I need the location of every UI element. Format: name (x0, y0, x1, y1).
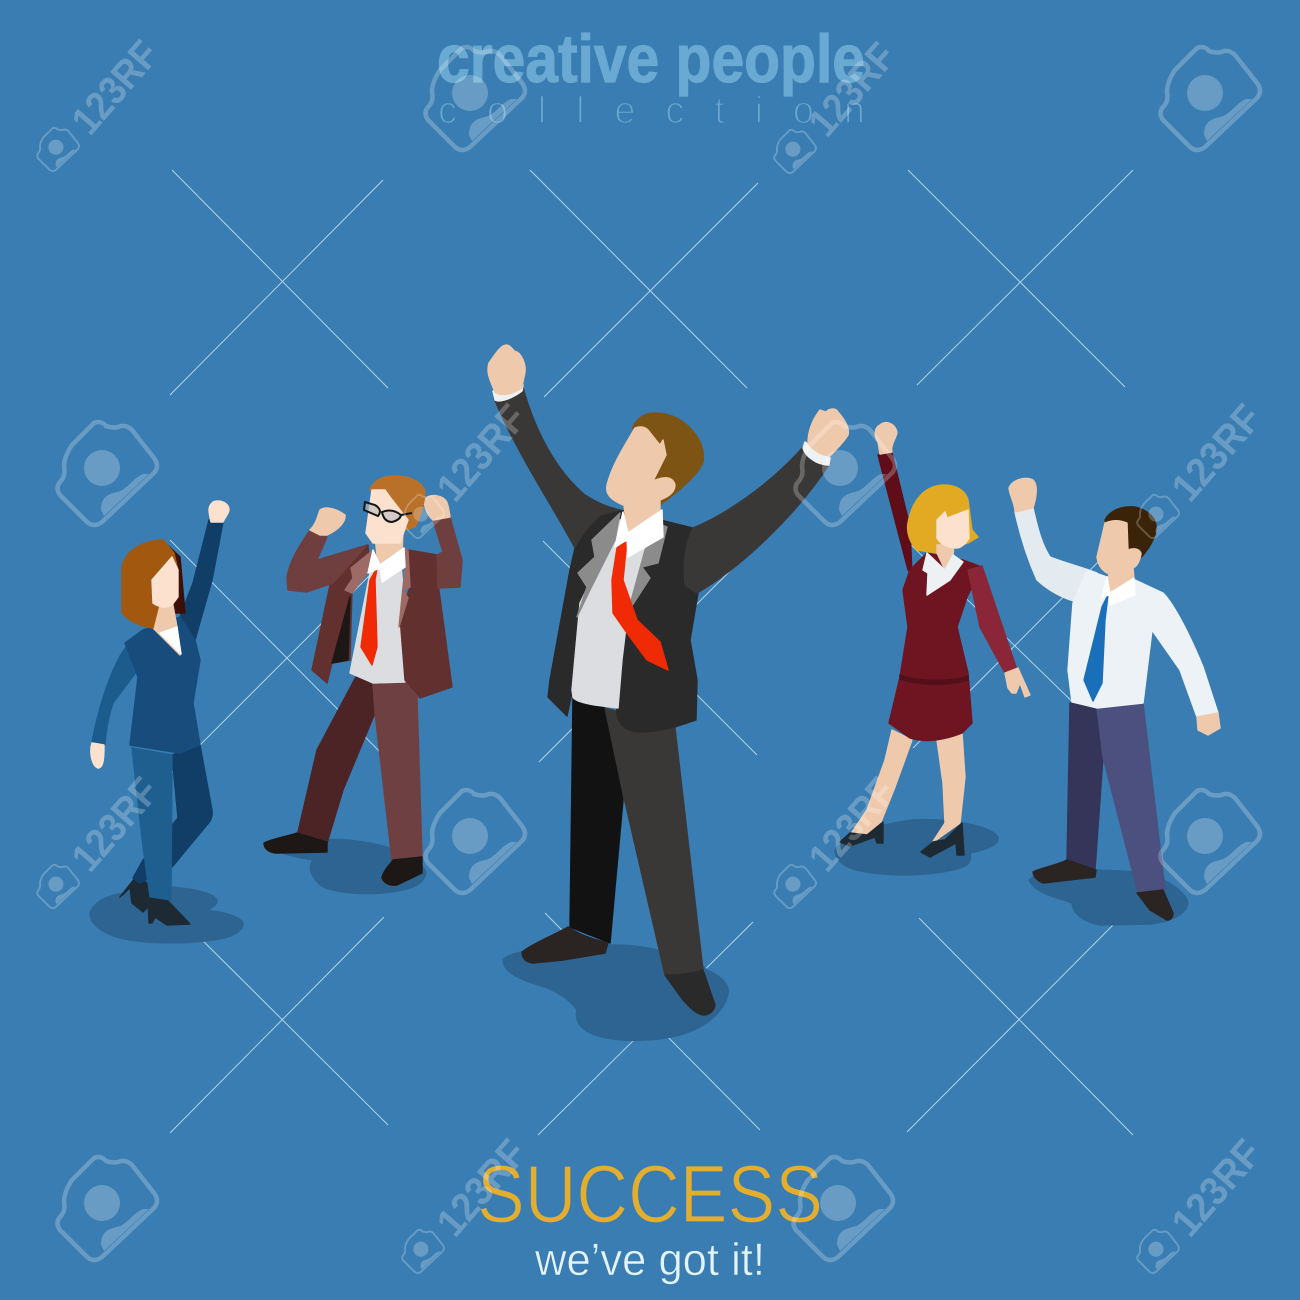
watermark stamps: 123RF (801, 770, 905, 880)
right hand (424, 495, 450, 520)
left fist (488, 345, 525, 395)
shirt (350, 555, 405, 683)
right raised arm (684, 445, 830, 593)
hair back (163, 541, 185, 613)
dress (889, 553, 982, 740)
front leg (373, 682, 422, 860)
lining (332, 597, 350, 663)
front shoe (148, 898, 190, 925)
left shoe (522, 927, 608, 963)
collar (923, 553, 963, 595)
left fist (310, 508, 345, 535)
lapel right (628, 525, 667, 612)
header: creative people collection (437, 21, 865, 132)
left arm (287, 530, 367, 592)
raised arm and fist (180, 520, 223, 640)
right hand (1197, 713, 1220, 735)
left cuff (493, 385, 523, 401)
right arm (1135, 580, 1218, 717)
back leg (1067, 703, 1103, 870)
face (1097, 521, 1141, 573)
neck and blouse (153, 600, 180, 655)
right cuff (803, 442, 830, 465)
lapel left (577, 513, 620, 617)
jacket left side (312, 545, 370, 683)
back leg (133, 745, 212, 883)
face (152, 557, 178, 607)
shadow (835, 820, 998, 875)
hair (908, 485, 978, 553)
subtitle: we've got it!: we’ve got it! (534, 1234, 765, 1285)
face (607, 427, 675, 505)
tie (361, 568, 377, 665)
heading: creative people: creative people (437, 21, 865, 97)
watermark stamps: 123RF (1164, 397, 1270, 510)
jacket (548, 510, 698, 732)
shirt (572, 513, 662, 708)
jacket (125, 617, 200, 753)
back leg (850, 730, 912, 838)
figure: woman in burgundy dress (835, 423, 1030, 875)
watermark stamps: 123RF (801, 35, 905, 145)
watermark stamps: 123RF (429, 1132, 535, 1245)
front leg (932, 733, 965, 843)
watermark stamps: 123RF (429, 397, 535, 510)
shoes (1033, 860, 1096, 883)
front leg (1097, 703, 1165, 893)
figure: man in white shirt with blue tie (1009, 478, 1220, 925)
face (366, 490, 408, 543)
lapels (345, 550, 373, 593)
figure: main businessman in black suit (488, 345, 848, 1040)
watermark stamps: 123RF (64, 770, 168, 880)
decorative diagonal guide lines (170, 170, 1133, 1135)
hair (370, 476, 425, 530)
collar (1102, 577, 1135, 605)
torso shirt (1068, 570, 1152, 708)
left raised arm (494, 388, 620, 548)
right leg (605, 708, 703, 975)
shadow (90, 887, 243, 943)
shoes (840, 822, 883, 846)
front leg (132, 748, 172, 900)
title: SUCCESS: SUCCESS (477, 1149, 823, 1240)
jacket right side (400, 550, 452, 698)
neck (937, 545, 954, 570)
hair (633, 413, 703, 505)
figure: man in brown suit with glasses (264, 476, 462, 894)
raised arm (1015, 508, 1097, 602)
tie (612, 540, 668, 670)
back leg (298, 673, 375, 843)
raised arm and fist (878, 453, 912, 575)
hand (1005, 668, 1030, 697)
right fist (808, 409, 848, 456)
glasses (364, 502, 412, 522)
right shoe (665, 970, 715, 1015)
right arm (433, 517, 462, 588)
face (937, 510, 969, 548)
neck (623, 495, 660, 533)
hair (122, 540, 178, 628)
watermark stamps: 123RF (64, 33, 168, 143)
hair (1105, 507, 1156, 565)
shoes (264, 833, 327, 853)
neck and collar (375, 530, 403, 566)
figure: woman in blue suit (90, 501, 243, 943)
subheading: collection: collection (438, 90, 865, 132)
shadow (1029, 869, 1188, 925)
neck (1108, 567, 1134, 594)
right arm (968, 566, 1017, 673)
collar (615, 510, 663, 557)
tie (1084, 595, 1108, 701)
watermark stamps: 123RF (1164, 1132, 1270, 1245)
shadow (265, 839, 426, 894)
back shoe (120, 878, 152, 912)
belt (900, 675, 968, 684)
left leg (570, 697, 623, 943)
raised fist (1009, 478, 1036, 512)
shadow (503, 945, 728, 1040)
left arm and hand (92, 632, 143, 745)
